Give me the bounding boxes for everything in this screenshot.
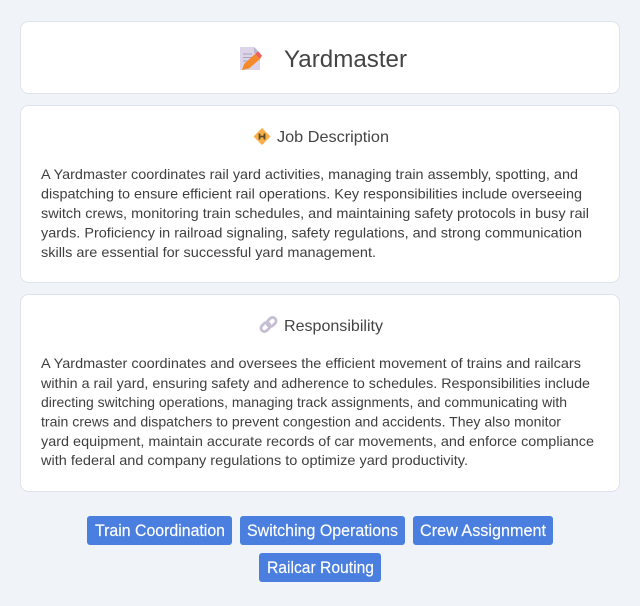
text: responsibility body: within a rail yard, ensuring safety and adherence to schedules. Responsibilities include (40, 375, 590, 391)
text: job description body: A Yardmaster coordinates rail yard activities, managing train assembly, spotting, and (41, 166, 578, 182)
icon: document with pencil (240, 47, 262, 70)
text: responsibility body: train crews and dispatchers to prevent congestion and accidents. They also monitor (41, 414, 561, 430)
text: responsibility body (40, 355, 594, 468)
text: job description body: dispatching to ensure efficient rail operations. Key responsibilities include overseeing (41, 186, 582, 202)
text: job description body (41, 166, 589, 260)
icon: road sign (254, 128, 270, 145)
tag: Switching Operations: Switching Operations (247, 522, 398, 540)
text: responsibility body: with federal and company regulations to optimize yard productivity. (40, 452, 468, 468)
heading: Yardmaster: Yardmaster (284, 46, 407, 73)
text: responsibility body: directing switching operations, managing track assignments, and communicating with (41, 394, 567, 410)
panel: responsibility (20, 294, 620, 492)
tag: Crew Assignment (413, 516, 553, 545)
text: job description body: skills are essential for successful yard management. (41, 244, 376, 260)
tag: Switching Operations (240, 516, 405, 545)
tag: Train Coordination: Train Coordination (95, 522, 225, 540)
panel: title (20, 22, 620, 94)
heading: Job Description: Job Description (277, 129, 389, 146)
text: responsibility body: A Yardmaster coordinates and oversees the efficient movement of trains and railcars (41, 355, 581, 371)
tag: Train Coordination (87, 516, 232, 545)
tags: skill pills (87, 516, 553, 582)
text: responsibility body: yard equipment, maintain accurate records of car movements, and enforce compliance (41, 433, 594, 449)
tag: Railcar Routing: Railcar Routing (267, 559, 374, 577)
tag: Crew Assignment: Crew Assignment (420, 522, 546, 540)
panel: job description (20, 106, 620, 282)
text: job description body: switch crews, monitoring train schedules, and maintaining safety protocols in busy rail (41, 205, 589, 221)
text: job description body: yards. Proficiency in railroad signaling, safety regulations, and strong communication (41, 224, 582, 240)
icon: chain link (259, 316, 278, 333)
tag: Railcar Routing (259, 553, 381, 582)
heading: Responsibility: Responsibility (284, 318, 383, 335)
